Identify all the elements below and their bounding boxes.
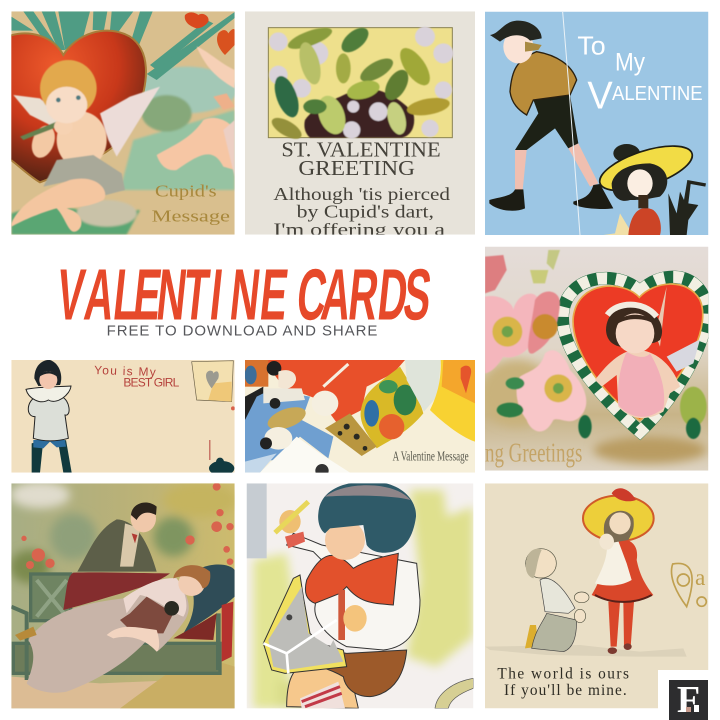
- subtitle: FREE TO DOWNLOAD AND SHARE: [107, 323, 377, 340]
- caption: A Valentine Message: A Valentine Message: [393, 449, 469, 464]
- patchwork heart: [325, 367, 423, 456]
- garden foliage: [10, 482, 237, 583]
- greeting heading: ST. VALENTINE: [281, 140, 441, 162]
- child in red bow: [275, 502, 420, 708]
- panel: To My Valentine postcard: [485, 12, 708, 235]
- panel: St. Valentine Greeting postcard: [245, 11, 475, 239]
- greeting heading: GREETING: [298, 158, 415, 180]
- pillow: [183, 565, 235, 633]
- inkwell and quill: [209, 440, 234, 476]
- panel: A Valentine Message postcard: [245, 360, 475, 477]
- flower wreath: [563, 277, 707, 432]
- caption: Greetings: ng Greetings: [485, 438, 582, 468]
- caption: Cupid's Message: Message: [152, 207, 230, 226]
- tan ground wash: [480, 360, 707, 463]
- hobby horse head: [263, 575, 347, 673]
- horse tail: [435, 678, 473, 708]
- logo badge: F: [677, 679, 700, 720]
- panel: couple on garden bench postcard: [10, 482, 237, 708]
- verse: The world is ours: [497, 665, 629, 682]
- panel: You is my best girl postcard: [11, 360, 235, 476]
- logo badge: [669, 679, 708, 720]
- panel: Cupid's Message postcard: [7, 11, 237, 235]
- panel: cherub in red heart postcard: [480, 247, 708, 471]
- harlequin figure: [245, 361, 350, 477]
- greeting heading: [282, 142, 440, 175]
- green bench: [11, 574, 220, 680]
- verse: I'm offering you a: [273, 219, 445, 239]
- card lettering: My: [615, 50, 646, 77]
- woman in lilac dress: [15, 565, 210, 693]
- girl in yellow hat: [583, 488, 654, 654]
- man in grey jacket: [77, 503, 157, 572]
- red heart: [573, 284, 703, 420]
- title block: [53, 255, 435, 340]
- top-left colour patches: [245, 360, 268, 420]
- title: Valentine Cards: VALENTINE CARDS: [53, 255, 435, 335]
- sky and meadow background: [11, 67, 237, 235]
- verse: Although 'tis pierced: [273, 184, 450, 204]
- card lettering: [578, 36, 702, 108]
- plant: [668, 180, 706, 235]
- second cherub legs: [157, 47, 235, 177]
- verse: If you'll be mine.: [504, 682, 627, 699]
- girl in yellow hat: [598, 144, 694, 235]
- verse: [497, 665, 629, 699]
- ground and grass: [11, 653, 235, 708]
- card lettering: ALENTINE: [612, 82, 703, 105]
- smudge: [231, 406, 235, 410]
- bobbed hair and face: [318, 482, 416, 560]
- cherub girl: [595, 287, 700, 418]
- small hearts: [185, 12, 235, 55]
- gold ornamental letter: [671, 563, 706, 607]
- yellow-green wash: [253, 490, 473, 708]
- caption: Cupid's Message: Cupid's: [155, 182, 217, 201]
- paper crease marks: [563, 12, 580, 235]
- green fan rays: [11, 11, 235, 80]
- cupid: [11, 60, 160, 232]
- card lettering: V: [587, 73, 613, 117]
- handwritten message: BEST GIRL: [123, 376, 180, 390]
- striped curtain: [405, 360, 441, 412]
- boy in ruff collar: [26, 360, 72, 473]
- white corner cut-out: [658, 670, 720, 720]
- panel: The world is ours postcard: [485, 483, 708, 708]
- kneeling boy: [525, 549, 589, 652]
- pink wild roses: [485, 250, 707, 439]
- verse: [274, 187, 450, 235]
- handwritten message: [94, 366, 179, 386]
- big red heart: [7, 31, 146, 182]
- panel: child on hobby horse postcard: [247, 482, 473, 708]
- boy walking away: [489, 21, 613, 211]
- caption: Cupid's Message: [152, 182, 230, 226]
- verse: by Cupid's dart,: [297, 201, 434, 221]
- grey-blue wall patch: [247, 483, 267, 558]
- card lettering: To: [577, 30, 606, 60]
- yellow heart: [430, 360, 475, 442]
- note with grey heart: [192, 361, 233, 402]
- handwritten message: You is My: [94, 363, 156, 379]
- ground strokes: [485, 645, 687, 657]
- floral illustration: [268, 23, 453, 143]
- red heart background: [263, 360, 405, 423]
- red drape: [63, 572, 170, 610]
- gold ornamental letter: a: [695, 565, 706, 591]
- roses: [21, 483, 234, 569]
